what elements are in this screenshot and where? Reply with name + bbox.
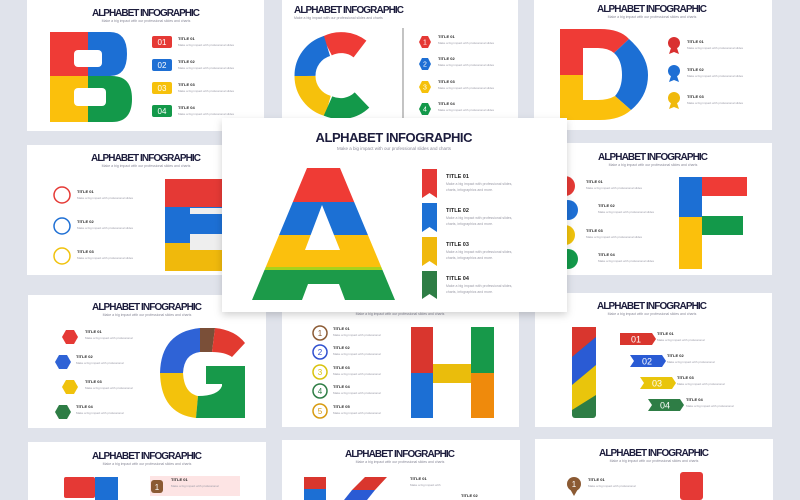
slide: L (bottom right): TITLE 01 — [588, 477, 605, 482]
list A: TITLE 01 — [446, 174, 469, 180]
list E: TITLE 02 — [77, 219, 94, 224]
list C: 4 — [423, 106, 427, 114]
list F: Make a big impact with professional slides — [598, 259, 655, 263]
list D: Make a big impact with professional slides — [687, 46, 744, 50]
list F: TITLE 03 — [586, 228, 603, 233]
slide: L (bottom right): 1 — [572, 480, 577, 489]
list A: charts, infographics and more. — [446, 290, 493, 294]
list A: Make a big impact with professional slides, — [446, 216, 512, 220]
list B: TITLE 04 — [178, 105, 195, 110]
list E — [54, 187, 134, 264]
list B: Make a big impact with professional slides — [178, 43, 235, 47]
list I: Make a big impact with professional — [667, 360, 715, 364]
title E: ALPHABET INFOGRAPHIC — [91, 153, 201, 164]
list G: Make a big impact with professional — [76, 411, 124, 415]
list G: TITLE 04 — [76, 404, 93, 409]
title I: ALPHABET INFOGRAPHIC — [597, 301, 707, 312]
list F: Make a big impact with professional slides — [586, 186, 643, 190]
list C: TITLE 02 — [438, 56, 455, 61]
title F: ALPHABET INFOGRAPHIC — [598, 152, 708, 163]
slide: H — [282, 292, 519, 427]
list G: Make a big impact with professional — [76, 361, 124, 365]
slide: I: Make a big impact with our professional slides and charts — [608, 312, 697, 316]
list H: TITLE 01 — [333, 326, 350, 331]
list B: 01 — [158, 38, 167, 47]
title A: ALPHABET INFOGRAPHIC — [316, 130, 473, 145]
list H: Make a big impact with professional — [333, 372, 381, 376]
slide: J (bottom left): Make a big impact with professional — [171, 484, 219, 488]
list G: TITLE 03 — [85, 379, 102, 384]
list I: TITLE 04 — [686, 397, 703, 402]
list I: TITLE 02 — [667, 353, 684, 358]
list A: Make a big impact with professional slides, — [446, 250, 512, 254]
list E: TITLE 03 — [77, 249, 94, 254]
list C: Make a big impact with professional slides — [438, 86, 495, 90]
list C: Make a big impact with professional slides — [438, 108, 495, 112]
list B: Make a big impact with professional slides — [178, 112, 235, 116]
list D — [668, 37, 744, 109]
list F: TITLE 01 — [586, 179, 603, 184]
list C — [419, 34, 495, 115]
slide: K (bottom middle): TITLE 01 — [410, 476, 427, 481]
list B: TITLE 02 — [178, 59, 195, 64]
slide: B — [27, 0, 264, 131]
list A: TITLE 02 — [446, 208, 469, 214]
list C: 1 — [423, 40, 427, 46]
list D: TITLE 03 — [687, 94, 704, 99]
list E: TITLE 01 — [77, 189, 94, 194]
slide: K (bottom middle): TITLE 02 — [461, 493, 478, 498]
slide: L (bottom right): Make a big impact with our professional slides and charts — [610, 459, 699, 463]
slide: H: Make a big impact with our professional slides and charts — [356, 312, 445, 316]
list C: Make a big impact with professional slides — [438, 63, 495, 67]
list H: 4 — [318, 387, 323, 396]
slide: L (bottom right) — [535, 439, 773, 500]
list A: charts, infographics and more. — [446, 256, 493, 260]
list F: TITLE 04 — [598, 252, 615, 257]
slide: E — [27, 145, 257, 275]
list C: TITLE 03 — [438, 79, 455, 84]
letter E — [165, 179, 225, 271]
list C: Make a big impact with professional slides — [438, 41, 495, 45]
title D: ALPHABET INFOGRAPHIC — [597, 4, 707, 15]
list G: Make a big impact with professional — [85, 336, 133, 340]
letter I — [572, 327, 596, 418]
list H: 5 — [318, 407, 323, 416]
list G: Make a big impact with professional — [85, 386, 133, 390]
slide: I — [535, 293, 772, 427]
list H: Make a big impact with professional — [333, 391, 381, 395]
list F: Make a big impact with professional slides — [598, 210, 655, 214]
subtitle A: Make a big impact with our professional slides and charts — [337, 146, 452, 151]
slide: D — [534, 0, 772, 130]
letter B — [50, 32, 132, 122]
letter D — [560, 29, 648, 120]
slide: G: Make a big impact with our professional slides and charts — [103, 313, 192, 317]
list E: Make a big impact with professional slides — [77, 226, 134, 230]
list E: Make a big impact with professional slides — [77, 256, 134, 260]
slide: K (bottom middle) — [282, 440, 520, 500]
list I: 03 — [652, 378, 662, 388]
list H: Make a big impact with professional — [333, 411, 381, 415]
letter F — [679, 177, 747, 269]
slide: F — [535, 143, 772, 275]
list B — [152, 36, 235, 117]
slide: J (bottom left): 1 — [155, 483, 160, 492]
list A: Make a big impact with professional slides, — [446, 284, 512, 288]
slide: J (bottom left): TITLE 01 — [171, 477, 188, 482]
list F — [555, 176, 655, 269]
list B: TITLE 03 — [178, 82, 195, 87]
letter C — [305, 43, 362, 109]
slide: K (bottom middle): Make a big impact with — [410, 483, 441, 487]
list A: TITLE 04 — [446, 276, 470, 282]
title B: ALPHABET INFOGRAPHIC — [92, 8, 200, 19]
list I: 04 — [660, 400, 670, 410]
list B: TITLE 01 — [178, 36, 195, 41]
list A: charts, infographics and more. — [446, 222, 493, 226]
title G: ALPHABET INFOGRAPHIC — [92, 302, 202, 313]
list B: 02 — [158, 61, 167, 70]
letter H — [411, 327, 494, 418]
slide: A (center featured) — [222, 118, 567, 312]
list C: TITLE 04 — [438, 101, 455, 106]
slide: E: Make a big impact with our professional slides and charts — [102, 164, 191, 168]
slide: B: Make a big impact with our professional slides and charts — [102, 19, 191, 23]
letter A — [252, 168, 395, 300]
list H: TITLE 02 — [333, 345, 350, 350]
list I: 02 — [642, 356, 652, 366]
slide: D: Make a big impact with our professional slides and charts — [608, 15, 697, 19]
slide: K (bottom middle): Make a big impact with our professional slides and charts — [356, 460, 445, 464]
slide: L (bottom right): Make a big impact with professional — [588, 484, 636, 488]
list A — [446, 174, 512, 294]
list C: 3 — [423, 84, 427, 92]
list H: 1 — [318, 329, 323, 338]
list B: 04 — [158, 107, 167, 116]
list I: TITLE 01 — [657, 331, 674, 336]
list B: 03 — [158, 84, 167, 93]
list D: Make a big impact with professional slides — [687, 74, 744, 78]
slide: K (bottom middle): ALPHABET INFOGRAPHIC — [345, 449, 455, 460]
list H: 2 — [318, 348, 323, 357]
slide: C: Make a big impact with our professional slides and charts — [294, 16, 383, 20]
list I: TITLE 03 — [677, 375, 694, 380]
ribbons A — [422, 169, 437, 299]
letter G — [160, 328, 245, 418]
slide: L (bottom right): ALPHABET INFOGRAPHIC — [599, 448, 709, 459]
list I: Make a big impact with professional — [657, 338, 705, 342]
list A: TITLE 03 — [446, 242, 469, 248]
slide: C — [282, 0, 518, 125]
list F: TITLE 02 — [598, 203, 615, 208]
slide: F: Make a big impact with our professional slides and charts — [609, 163, 698, 167]
list I — [620, 331, 734, 411]
list I: Make a big impact with professional — [686, 404, 734, 408]
list B: Make a big impact with professional slides — [178, 66, 235, 70]
list C: 2 — [423, 62, 427, 68]
slide: J (bottom left) — [28, 442, 266, 500]
list E: Make a big impact with professional slides — [77, 196, 134, 200]
list H: TITLE 05 — [333, 404, 350, 409]
title C: ALPHABET INFOGRAPHIC — [294, 5, 404, 16]
list A: Make a big impact with professional slides, — [446, 182, 512, 186]
list G: TITLE 01 — [85, 329, 102, 334]
list C: TITLE 01 — [438, 34, 455, 39]
list I: 01 — [631, 334, 641, 344]
list H — [313, 326, 381, 418]
slide: J (bottom left): Make a big impact with our professional slides and charts — [103, 462, 192, 466]
list H: 3 — [318, 368, 323, 377]
list H: Make a big impact with professional — [333, 333, 381, 337]
list A: charts, infographics and more. — [446, 188, 493, 192]
list H: Make a big impact with professional — [333, 352, 381, 356]
list D: TITLE 02 — [687, 67, 704, 72]
slide: G — [28, 295, 266, 428]
slide: J (bottom left): ALPHABET INFOGRAPHIC — [92, 451, 202, 462]
list F: Make a big impact with professional slides — [586, 235, 643, 239]
list G: TITLE 02 — [76, 354, 93, 359]
list B: Make a big impact with professional slides — [178, 89, 235, 93]
list D: Make a big impact with professional slides — [687, 101, 744, 105]
list G — [55, 329, 133, 419]
list H: TITLE 04 — [333, 384, 350, 389]
list D: TITLE 01 — [687, 39, 704, 44]
list H: TITLE 03 — [333, 365, 350, 370]
list I: Make a big impact with professional — [677, 382, 725, 386]
